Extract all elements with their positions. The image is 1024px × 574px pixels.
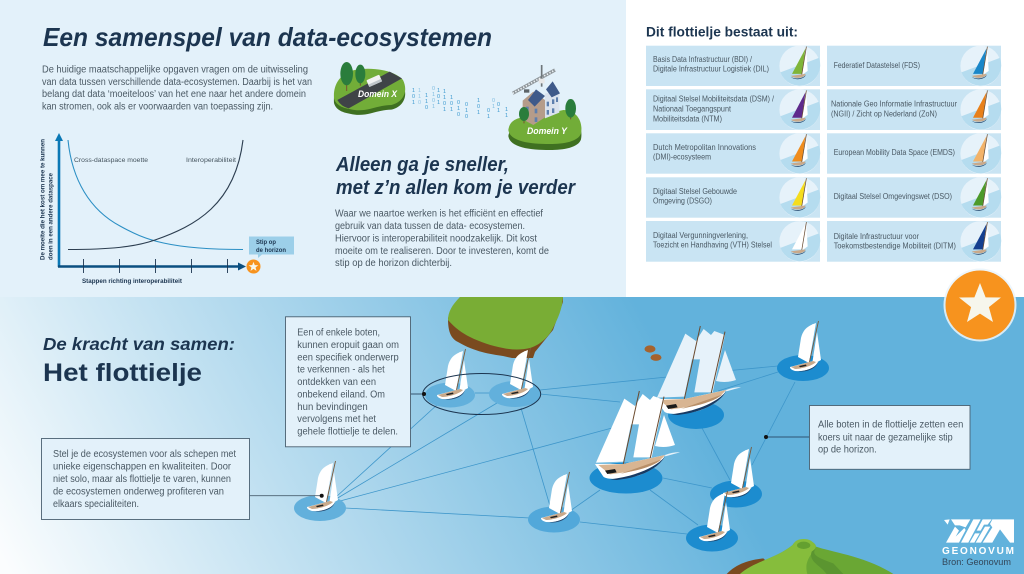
binary data stream: 0 [432, 86, 435, 92]
icon: rocks [644, 345, 662, 361]
card: NGII / ZoN: Nationale Geo Informatie Infrastructuur [831, 100, 957, 109]
binary data stream: 1 [443, 89, 446, 95]
callout: ecosystemen als schepen: Stel je de ecosystemen voor als schepen met [53, 449, 236, 460]
curve label: Cross-dataspace moette [74, 157, 148, 164]
binary data stream: 1 [425, 99, 428, 105]
y axis arrow [55, 133, 63, 267]
icon: island at top [448, 297, 563, 358]
callout: boten eropuit: te verkennen - als het [297, 365, 385, 376]
binary data stream: 1 [443, 107, 446, 113]
explorer ring [423, 374, 541, 414]
binary data stream: 0 [437, 94, 440, 100]
binary data stream: 1 [505, 107, 508, 113]
binary data stream: 1 [443, 95, 446, 101]
binary data stream: 1 [432, 104, 435, 110]
card: DITM [827, 221, 1001, 262]
boat: right middle [710, 447, 762, 508]
body text: interoperabiliteit: Waar we naartoe werken is het efficiënt en effectief [335, 209, 543, 220]
binary data stream: 1 [450, 95, 453, 101]
binary data stream: 0 [457, 112, 460, 118]
body text: interoperabiliteit: gebruik van data tussen de data- ecosystemen. [335, 221, 525, 232]
boat: explorer left [425, 349, 475, 408]
callout: ecosystemen als schepen [42, 438, 324, 520]
binary data stream: 0 [450, 101, 453, 107]
callout: boten eropuit: vervolgens met het [297, 414, 376, 425]
card: DSM / NTM: Digitaal Stelsel Mobiliteitsdata (DSM) / [653, 95, 775, 104]
binary data stream: 0 [465, 102, 468, 108]
callout: ecosystemen als schepen: niet solo, maar als flottielje te varen, kunnen [53, 474, 231, 485]
card: NGII / ZoN: (NGII) / Zicht op Nederland (ZoN) [831, 109, 937, 118]
callout: boten eropuit: onbekend eiland. Om [297, 389, 385, 400]
binary data stream: 1 [505, 113, 508, 119]
binary data stream: 1 [412, 100, 415, 106]
card: FDS [827, 46, 1001, 86]
icon: domein Y island with houses and crane [508, 65, 581, 150]
heading: alleen ga je sneller: met z’n allen kom je verder [336, 176, 576, 199]
icon: star [246, 260, 260, 274]
card: EMDS [827, 133, 1001, 174]
card: DSO: Digitaal Stelsel Omgevingswet (DSO) [834, 192, 952, 201]
card: DSGO: Digitaal Stelsel Gebouwde [653, 187, 737, 196]
binary data stream: 1 [497, 108, 500, 114]
callout: boten eropuit: gehele flottielje te delen. [297, 426, 398, 438]
title: Een samenspel van data-ecosystemen [43, 22, 492, 52]
curve: interoperabiliteit [68, 140, 243, 250]
icon: domein X island [334, 62, 405, 115]
icon: big orange star [944, 268, 1016, 342]
card: VTH: Digitaal Vergunningverlening, [653, 231, 748, 240]
callout: koers naar de stip: koers uit naar de gezamelijke stip [818, 432, 953, 443]
callout: boten eropuit: kunnen eropuit gaan om [297, 340, 399, 351]
boat: left [294, 461, 346, 521]
binary data stream: 1 [465, 108, 468, 114]
callout: stip op de horizon: de horizon [256, 248, 286, 254]
heading: dit flottielje bestaat uit: Dit flottielje bestaat uit: [646, 24, 798, 40]
binary data stream: 1 [425, 93, 428, 99]
callout: stip op de horizon [249, 236, 294, 258]
callout: ecosystemen als schepen: elkaars specialiteiten. [53, 499, 139, 510]
binary data stream: 0 [487, 108, 490, 114]
card: DSM / NTM: Nationaal Toegangspunt [653, 105, 732, 114]
curve label: Interoperabiliteit [186, 157, 236, 164]
boat: right bottom [686, 491, 738, 552]
boat: top right [777, 321, 829, 381]
card: BDI / DIL: Digitale Infrastructuur Logistiek (DIL) [653, 65, 769, 74]
binary data stream: 1 [418, 94, 421, 100]
binary data stream: 1 [437, 100, 440, 106]
logo: Geonovum: GEONOVUM [942, 546, 1014, 557]
card: EMDS: European Mobility Data Space (EMDS) [834, 148, 955, 157]
card: DMI: (DMI)-ecosysteem [653, 153, 711, 162]
x axis arrow [58, 262, 246, 270]
card: BDI / DIL [646, 46, 820, 86]
callout: ecosystemen als schepen: unieke eigenschappen en kwaliteiten. Door [53, 462, 232, 473]
binary data stream: 1 [412, 88, 415, 94]
binary data stream: 0 [492, 98, 495, 104]
body text: interoperabiliteit: stip op de horizon dichterbij. [335, 258, 452, 269]
card: VTH: Toezicht en Handhaving (VTH) Stelsel [653, 240, 772, 249]
body text: interoperabiliteit: Hiervoor is interoperabiliteit noodzakelijk. Dit kost [335, 234, 537, 244]
binary data stream: 1 [492, 104, 495, 110]
callout: boten eropuit [286, 317, 426, 447]
card: VTH [646, 221, 820, 262]
heading: alleen ga je sneller [335, 153, 576, 199]
card: DITM: Toekomstbestendige Mobiliteit (DITM) [834, 241, 956, 250]
callout: koers naar de stip: Alle boten in de flottielje zetten een [818, 420, 963, 431]
intro text: kan stromen, ook als er voorwaarden van toepassing zijn. [42, 102, 273, 112]
callout: boten eropuit: ontdekken van een [297, 377, 376, 388]
curve: cross-dataspace moeite [68, 140, 243, 250]
label: Domein X: Domein X [358, 89, 398, 99]
callout: ecosystemen als schepen: de ecosystemen onderweg profiteren van [53, 486, 224, 498]
heading: alleen ga je sneller: Alleen ga je sneller, [335, 153, 509, 176]
card: DITM: Digitale Infrastructuur voor [834, 232, 919, 241]
network lines between boats [336, 366, 795, 534]
card: DSO [827, 177, 1001, 218]
card: DSGO: Omgeving (DSGO) [653, 197, 712, 206]
callout: boten eropuit: Een of enkele boten, [297, 328, 380, 339]
binary data stream: 1 [487, 114, 490, 120]
ship: rear [656, 326, 741, 429]
callout: boten eropuit: een specifiek onderwerp [297, 352, 399, 363]
label: Domein Y: Domein Y [527, 126, 568, 136]
binary data stream: 0 [425, 105, 428, 111]
binary data stream [412, 86, 508, 120]
panel: data-ecosystemen background [0, 0, 626, 297]
body text: interoperabiliteit: moeite om te realiseren. Door te investeren, komt de [335, 246, 549, 257]
binary data stream: 0 [465, 114, 468, 120]
binary data stream: 0 [418, 100, 421, 106]
x axis label: Stappen richting interoperabiliteit [82, 279, 182, 285]
intro text: belang dat data ‘moeiteloos’ van het ene naar het andere domein [42, 89, 306, 100]
heading: de kracht van samen: De kracht van samen: [43, 334, 235, 354]
body text: interoperabiliteit [335, 209, 549, 269]
binary data stream: 1 [450, 107, 453, 113]
callout: stip op de horizon: Stip op [256, 240, 276, 246]
binary data stream: 0 [432, 98, 435, 104]
binary data stream: 0 [443, 101, 446, 107]
panel: flotilla background [0, 297, 1024, 574]
source: Bron: Geonovum [942, 557, 1011, 568]
callout: koers naar de stip [764, 406, 970, 469]
card: DSM / NTM [646, 89, 820, 130]
card: DSGO [646, 177, 820, 218]
binary data stream: 0 [477, 104, 480, 110]
binary data stream: 0 [497, 102, 500, 108]
binary data stream: 1 [477, 110, 480, 116]
binary data stream: 1 [432, 92, 435, 98]
y axis label: doen in een andere dataspace [48, 172, 54, 260]
binary data stream: 0 [412, 94, 415, 100]
callout: boten eropuit: hun bevindingen [297, 402, 368, 413]
callout: koers naar de stip: op de horizon. [818, 445, 877, 456]
y axis label: De moeite die het kost om mee te kunnen [40, 139, 46, 260]
boat: centre bottom [528, 472, 580, 532]
icon: volcano island [727, 539, 893, 574]
binary data stream: 1 [418, 88, 421, 94]
ship: front [590, 391, 680, 494]
binary data stream: 1 [477, 98, 480, 104]
y axis label [40, 139, 54, 260]
card: DSM / NTM: Mobiliteitsdata (NTM) [653, 115, 722, 124]
card: FDS: Federatief Datastelsel (FDS) [834, 61, 920, 70]
heading: de kracht van samen [43, 334, 235, 387]
boat: explorer right [489, 348, 541, 407]
card: DMI [646, 133, 820, 174]
heading: de kracht van samen: Het flottielje [43, 359, 202, 387]
intro text: van data tussen verschillende data-ecosystemen. Daarbij is het van [42, 77, 312, 88]
card: NGII / ZoN [827, 89, 1001, 130]
intro text [42, 64, 312, 112]
binary data stream: 0 [457, 100, 460, 106]
logo: Geonovum [942, 519, 1014, 568]
card: DMI: Dutch Metropolitan Innovations [653, 143, 756, 152]
card: BDI / DIL: Basis Data Infrastructuur (BDI) / [653, 55, 753, 64]
binary data stream: 1 [457, 106, 460, 112]
line chart: moeite versus interoperabiliteit [40, 133, 294, 285]
binary data stream: 1 [437, 88, 440, 94]
intro text: De huidige maatschappelijke opgaven vragen om de uitwisseling [42, 64, 308, 76]
